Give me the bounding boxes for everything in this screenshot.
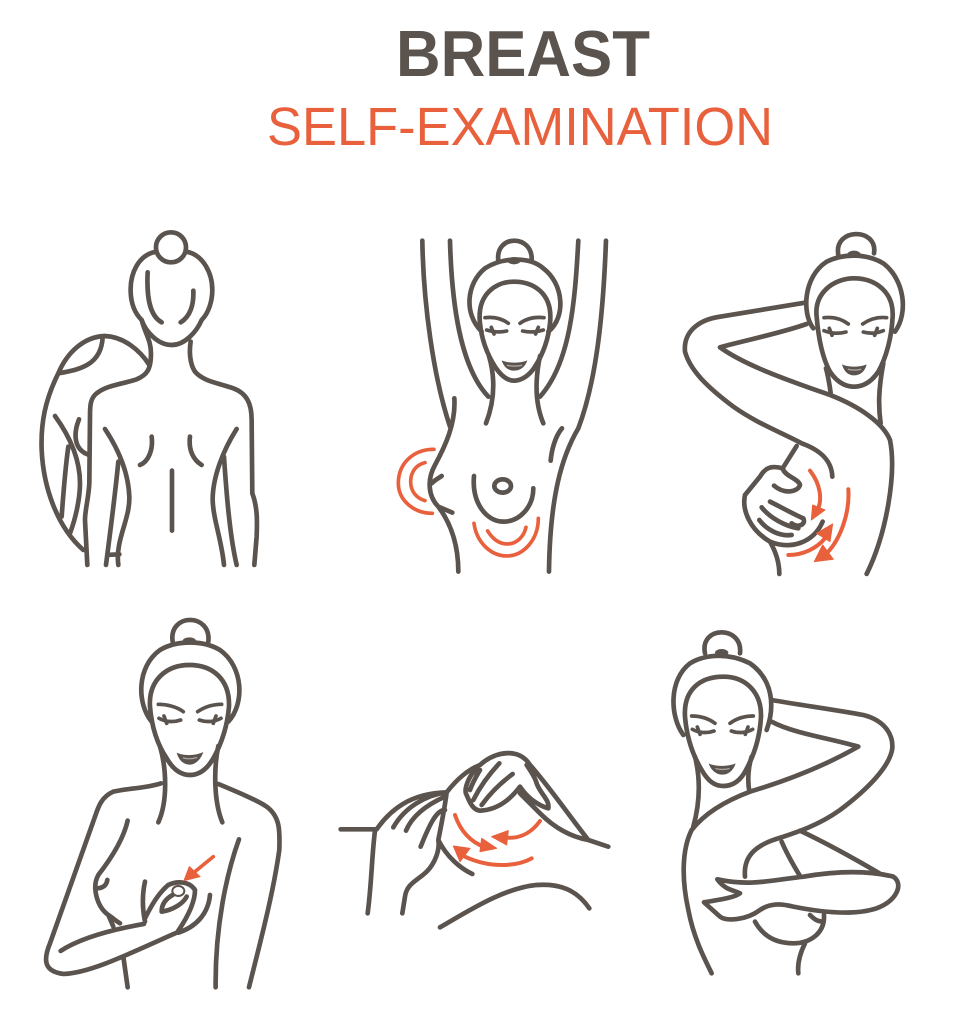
head with hair and face [469,241,560,381]
hair bun and head [131,232,212,345]
nipple [172,886,184,896]
head with hair and face [673,632,771,786]
panel: figure seen from behind [42,232,257,565]
orange circular arrows [788,471,848,562]
orange circular arrows [453,815,540,865]
title: BREAST [396,17,650,90]
raised arm and torso [685,303,892,574]
arm and hand pinching [61,882,210,951]
torso outline [85,320,257,565]
panel: lying down examination [341,753,608,927]
lower chest lines [755,915,824,973]
orange arrow [184,857,213,881]
body line [440,885,589,927]
raised arm and torso [684,700,892,973]
panel: other arm behind head [673,632,898,973]
panel: arm behind head, palpating [685,234,903,574]
head with hair and face [141,620,239,775]
subtitle: SELF-EXAMINATION [267,97,773,157]
forearm across chest [704,872,898,919]
panel: arms raised, checking shape [398,241,606,572]
orange shape-change arcs [398,449,538,556]
upper arm and hand [447,753,608,847]
lower arm and hand [341,792,472,913]
neck and torso [46,746,280,987]
nipple circle [494,479,511,493]
neck and torso [430,356,562,572]
arm and back details [105,429,237,565]
examining hand [744,446,823,574]
raised arm behind back [42,336,149,550]
raised arms [422,241,606,572]
head with hair and face [806,234,903,387]
panel: checking the nipple [46,620,280,987]
